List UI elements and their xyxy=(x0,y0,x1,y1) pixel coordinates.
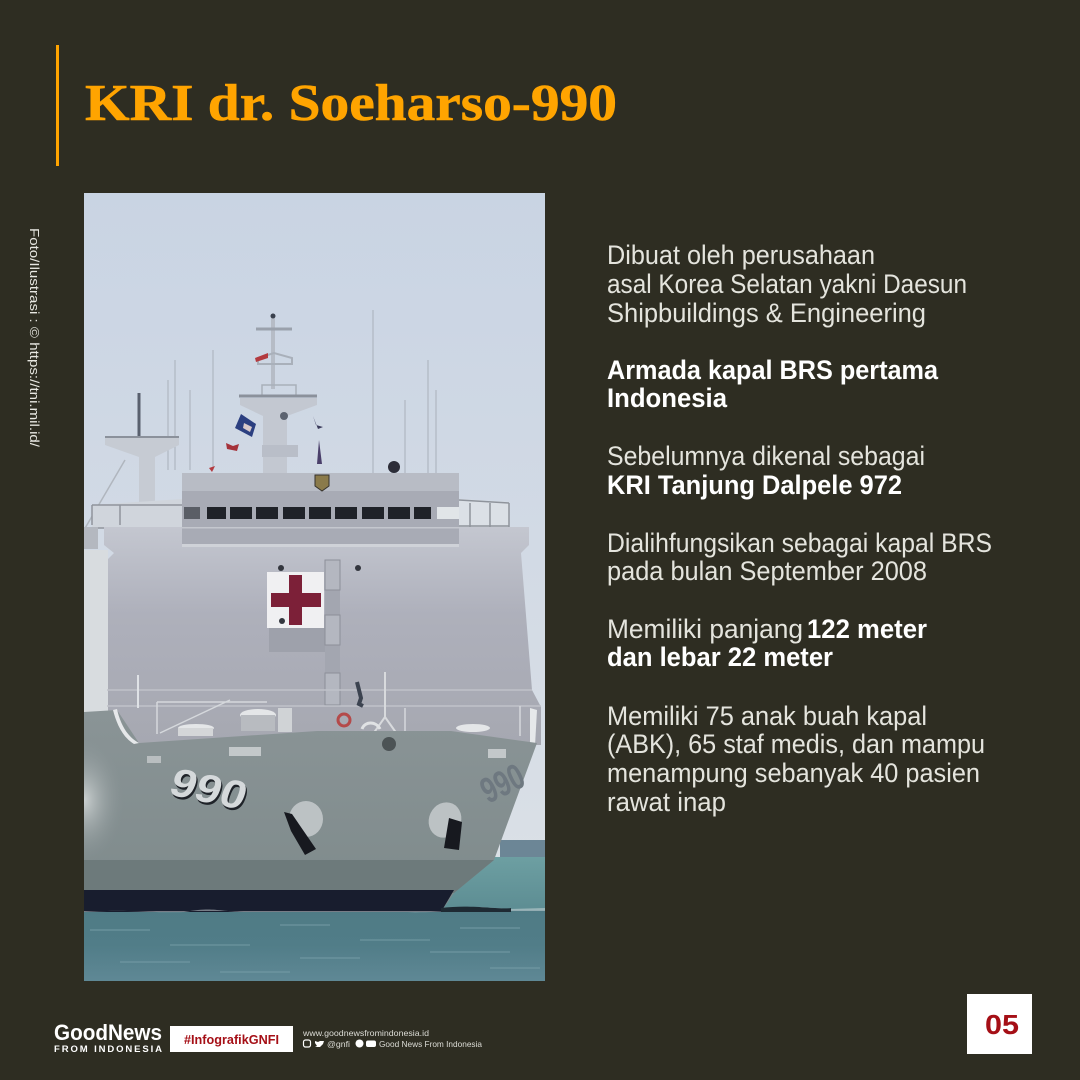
bow mist xyxy=(84,759,111,844)
distant land xyxy=(500,840,545,858)
text: crew: Memiliki 75 anak buah kapal xyxy=(607,701,927,731)
logo: GoodNews From Indonesia: GoodNews xyxy=(54,1020,162,1045)
superstructure xyxy=(104,527,541,745)
text: dimensions xyxy=(607,614,927,672)
logo: GoodNews From Indonesia xyxy=(54,1020,162,1055)
bridge xyxy=(182,473,459,547)
deck fittings on hull xyxy=(229,747,261,756)
icon: twitter xyxy=(315,1041,324,1047)
title: KRI dr. Soeharso-990 xyxy=(85,75,617,132)
icon: instagram xyxy=(304,1040,310,1047)
text: dimensions: 122 meter xyxy=(807,614,927,644)
text: maker: Shipbuildings & Engineering xyxy=(607,298,926,328)
hull xyxy=(44,709,537,912)
text: crew: menampung sebanyak 40 pasien xyxy=(607,758,980,788)
text: dimensions: dan lebar 22 meter xyxy=(607,642,833,672)
text: maker xyxy=(607,240,967,328)
text: former name: KRI Tanjung Dalpele 972 xyxy=(607,470,902,500)
icon: facebook xyxy=(356,1040,364,1048)
text: converted xyxy=(607,528,992,586)
page number xyxy=(967,994,1032,1054)
text: first BRS fleet xyxy=(607,355,939,413)
text: first BRS fleet: Indonesia xyxy=(607,383,728,413)
title accent bar xyxy=(56,45,59,166)
text: crew: (ABK), 65 staf medis, dan mampu xyxy=(607,729,985,759)
hawsepipes and anchors xyxy=(289,801,323,837)
bow number right: 990 xyxy=(474,755,531,811)
flags xyxy=(209,414,323,472)
bow wake xyxy=(84,907,545,912)
icon: youtube xyxy=(366,1040,376,1047)
white bow trim xyxy=(113,709,139,744)
text: crew xyxy=(607,701,985,817)
photo: hospital ship KRI dr. Soeharso xyxy=(44,193,545,981)
website and social handles: @gnfi xyxy=(327,1039,350,1049)
hull: 990 xyxy=(164,760,254,818)
main mast xyxy=(239,314,317,473)
text: former name xyxy=(607,441,925,500)
waterline band xyxy=(84,860,494,893)
bow number left: 990 xyxy=(165,762,255,821)
website and social handles: www.goodnewsfromindonesia.id xyxy=(302,1028,429,1038)
bridge windows xyxy=(184,507,431,519)
sea ripples xyxy=(90,925,540,972)
text: maker: asal Korea Selatan yakni Daesun xyxy=(607,269,967,299)
text: first BRS fleet: Armada kapal BRS pertama xyxy=(607,355,939,385)
deck railing and fittings xyxy=(107,672,541,746)
logo: GoodNews From Indonesia: FROM INDONESIA xyxy=(54,1044,162,1055)
side decks xyxy=(92,499,509,528)
mid panels xyxy=(269,560,361,705)
text: converted: Dialihfungsikan sebagai kapal BRS xyxy=(607,528,992,558)
website and social handles: Good News From Indonesia xyxy=(379,1039,482,1049)
hashtag badge xyxy=(170,1026,293,1052)
photo credit: Foto/Ilustrasi : © https://tni.mil.id/ xyxy=(27,228,42,447)
hashtag badge: #InfografikGNFI xyxy=(184,1033,279,1047)
text: converted: pada bulan September 2008 xyxy=(607,556,927,586)
text: crew: rawat inap xyxy=(607,787,726,817)
text: former name: Sebelumnya dikenal sebagai xyxy=(607,441,925,471)
text: maker: Dibuat oleh perusahaan xyxy=(607,240,875,270)
website and social handles xyxy=(302,1028,482,1049)
text: dimensions: Memiliki panjang xyxy=(607,614,803,644)
page number: 05 xyxy=(985,1009,1019,1040)
red cross emblem xyxy=(267,572,324,628)
rear mast xyxy=(84,393,179,530)
antennas xyxy=(168,310,436,473)
sea xyxy=(444,857,545,910)
radar dome xyxy=(388,461,400,473)
